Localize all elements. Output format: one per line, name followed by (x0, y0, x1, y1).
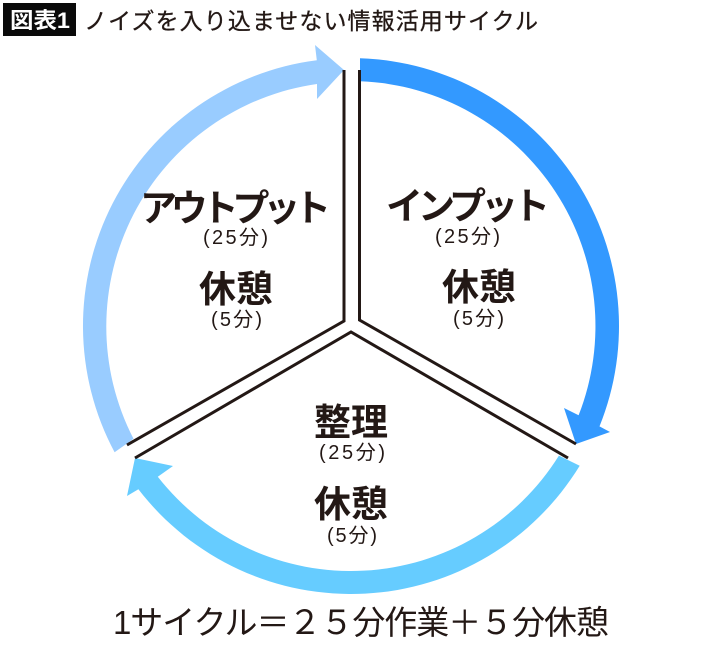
duration: 5 minutes: (5分) (211, 308, 262, 331)
segment: organize (314, 402, 388, 547)
duration: 25 minutes: (25分) (435, 225, 500, 248)
segment: input (386, 186, 550, 330)
duration: 5 minutes: (5分) (453, 307, 504, 330)
heading: organize: 整理 (314, 402, 388, 443)
footer formula: 1サイクル＝２５分作業＋５分休憩 (113, 604, 609, 641)
duration: 25 minutes: (25分) (203, 226, 268, 249)
badge: figure label: 図表1 (10, 8, 70, 33)
arrow: output to input (light blue) (83, 45, 344, 452)
badge: figure label (3, 3, 76, 36)
divider lines between the three segments (127, 70, 576, 458)
heading: input: インプット (386, 186, 550, 227)
heading: rest: 休憩 (314, 484, 388, 525)
duration: 5 minutes: (5分) (327, 524, 377, 547)
heading: rest: 休憩 (199, 269, 273, 310)
arrow: input to organize (blue) (360, 58, 619, 444)
heading: output: アウトプット (140, 188, 331, 229)
segment: output (140, 188, 331, 331)
duration: 25 minutes: (25分) (319, 441, 385, 464)
arrow: organize to output (sky blue) (127, 456, 580, 594)
heading: rest: 休憩 (442, 267, 516, 308)
title: ノイズを入り込ませない情報活用サイクル (84, 8, 538, 34)
